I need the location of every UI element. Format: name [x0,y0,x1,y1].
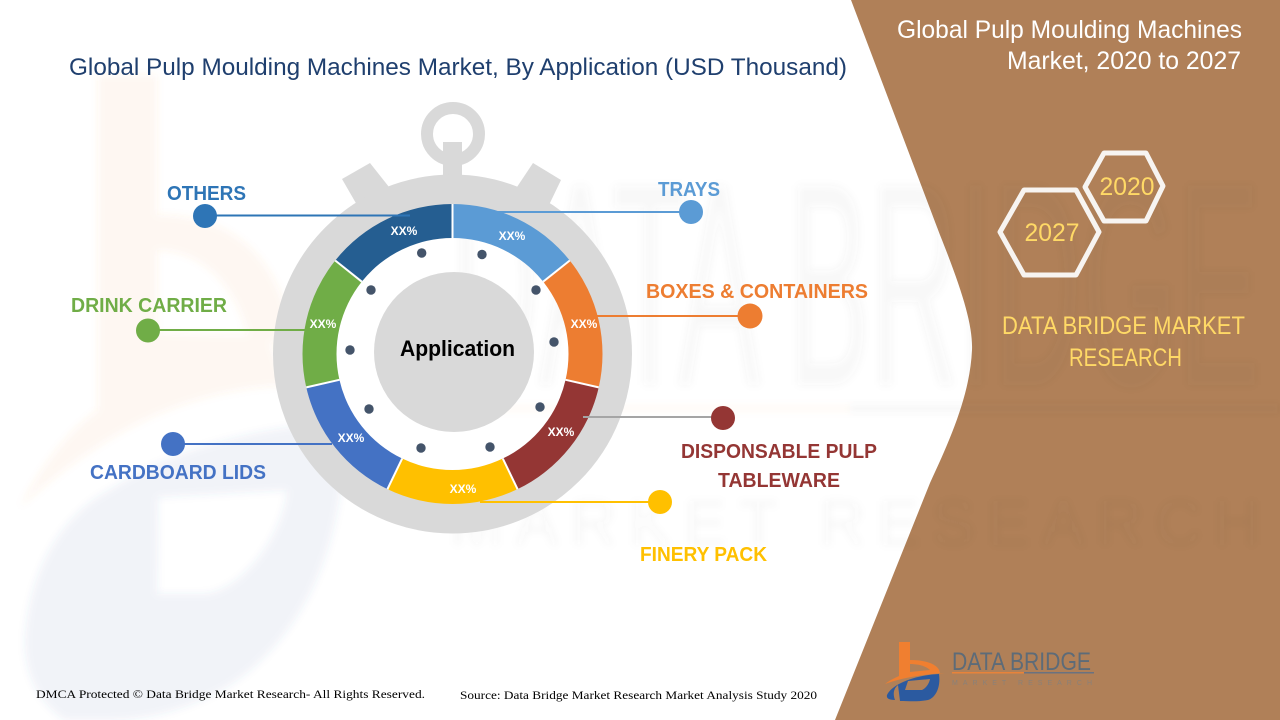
stopwatch body [288,108,617,518]
callout: others: OTHERS [167,183,246,205]
watermark: large logo and company name: MARKET RESEARCH [450,487,1260,559]
ring percentage labels: XX% [338,431,365,445]
segment: finery pack [387,459,518,504]
ring percentage labels: XX% [450,482,477,496]
logo: Data Bridge Market Research: MARKET RESEARCH [952,680,1092,687]
callout: finery pack [480,490,768,566]
callout: others [167,183,410,228]
footer: source: Source: Data Bridge Market Research Market Analysis Study 2020 [460,688,817,702]
panel heading [897,16,1242,75]
tick dots [345,248,559,453]
hexagon: 2020: 2020 [1100,173,1154,201]
panel: brown side panel [835,0,1280,720]
callout: cardboard lids: CARDBOARD LIDS [90,462,266,484]
ring chart: seven application segments [302,204,603,504]
icon: orange b mark [885,642,945,684]
callout: boxes and containers [565,281,868,328]
ring percentage labels: XX% [548,425,575,439]
panel heading: Market, 2020 to 2027 [1007,47,1241,75]
ring percentage labels: XX% [499,229,526,243]
segment: drink carrier [302,260,362,387]
logo: Data Bridge Market Research [885,642,1094,701]
callout: boxes and containers: BOXES & CONTAINERS [646,281,868,303]
ring percentage labels: XX% [310,317,337,331]
callout: disposable pulp tableware [583,406,877,492]
callout: disposable pulp tableware: TABLEWARE [718,470,840,492]
callout: trays [495,179,720,224]
callout: drink carrier [71,295,306,342]
segment: others [335,204,452,282]
ring percentage labels: XX% [571,317,598,331]
segment: disposable pulp tableware [503,380,599,489]
ring percentage labels [310,224,598,496]
segment: boxes and containers [543,260,603,387]
panel heading: Global Pulp Moulding Machines [897,16,1242,44]
company name: RESEARCH [1069,344,1182,372]
callout: cardboard lids [90,432,332,484]
title: Global Pulp Moulding Machines Market, By Application (USD Thousand) [69,54,847,81]
footer: copyright: DMCA Protected © Data Bridge Market Research- All Rights Reserved. [36,687,425,701]
centre circle: Application [374,272,534,432]
company name: DATA BRIDGE MARKET [1002,312,1245,340]
callout: trays: TRAYS [658,179,720,201]
hexagon: 2027 [1000,190,1099,275]
logo wordmark: DATA BRIDGE [952,648,1091,676]
callout: drink carrier: DRINK CARRIER [71,295,228,317]
company name [1002,312,1245,372]
centre circle: Application: Application [400,336,515,361]
hexagon: 2020 [1085,153,1163,221]
segment: cardboard lids [306,380,402,489]
hexagon: 2027: 2027 [1024,219,1080,247]
segment: trays [452,204,570,282]
callout: disposable pulp tableware: DISPONSABLE PULP [681,441,877,463]
ring percentage labels: XX% [391,224,418,238]
icon: blue eye mark [887,674,939,701]
callout: finery pack: FINERY PACK [640,544,768,566]
